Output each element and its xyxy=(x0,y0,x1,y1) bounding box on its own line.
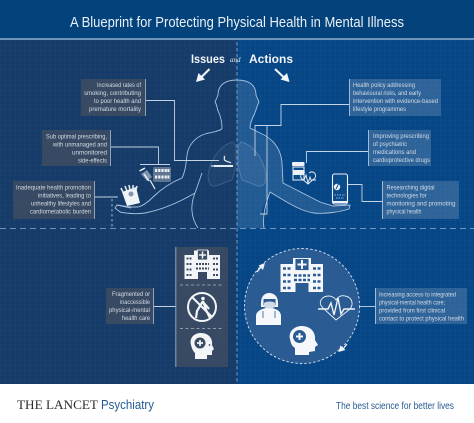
callout: prescribing issue xyxy=(42,130,111,166)
callout: smoking xyxy=(81,79,146,116)
callout: digital technologies: Researching digital xyxy=(386,186,434,192)
callout: health promotion: initiatives, leading to xyxy=(38,194,92,200)
heading: issues and actions: Issues xyxy=(191,52,225,66)
callout: fragmented care: health care xyxy=(122,316,151,322)
title: A Blueprint for Protecting Physical Health in Mental Illness xyxy=(70,14,404,31)
callout: health promotion: Inadequate health promotion xyxy=(16,186,91,192)
callout: integrated access: Increasing access to integrated xyxy=(379,292,456,298)
callout: health promotion: cardiometabolic burden xyxy=(30,210,91,216)
panel: issues background xyxy=(0,40,237,384)
icon: hospital xyxy=(280,258,323,292)
logo: The Lancet Psychiatry: Psychiatry xyxy=(101,397,154,412)
callout: digital technologies: monitoring and promoting xyxy=(386,202,456,208)
arrow: issues xyxy=(196,69,210,82)
callout: health policy: lifestyle programmes xyxy=(353,107,406,113)
panel: fragmented care icons xyxy=(176,247,228,367)
callout: digital technologies: technologies for xyxy=(386,194,426,200)
icon: doctor xyxy=(256,293,281,325)
callout: improving prescribing: Improving prescribing xyxy=(373,134,429,140)
arrow: actions xyxy=(275,69,290,82)
callout: health policy xyxy=(349,79,441,116)
icon: heart with pulse xyxy=(318,296,355,320)
callout: integrated access: provided from first clinical xyxy=(379,308,445,314)
body outline left xyxy=(115,80,237,228)
panel: integrated care circle xyxy=(244,248,360,364)
arrow: cycle top xyxy=(257,263,265,272)
heading: issues and actions: and xyxy=(230,56,241,64)
callout: smoking: premature mortality xyxy=(89,107,141,113)
callout: health policy: intervention with evidence-based xyxy=(353,99,438,105)
callout: integrated access: physical-mental health care; xyxy=(379,300,445,306)
logo: The Lancet Psychiatry xyxy=(17,397,154,412)
logo: The Lancet Psychiatry: THE LANCET xyxy=(17,397,98,412)
callout: prescribing issue: side-effects xyxy=(78,158,107,164)
callout: integrated access xyxy=(375,288,467,324)
icon: pill blister pack xyxy=(153,167,171,182)
header band xyxy=(0,0,474,40)
callout: fragmented care: Fragmented or xyxy=(112,292,150,298)
icon: heart with pulse xyxy=(298,172,316,184)
callout: smoking: Increased rates of xyxy=(97,83,141,89)
callout: fragmented care: physical-mental xyxy=(109,308,150,314)
icon: head with medical cross xyxy=(191,333,214,359)
callout: health policy: behavioural risks, and early xyxy=(353,91,421,97)
callout: health promotion xyxy=(13,181,95,219)
panel: actions background xyxy=(237,40,474,384)
icon: syringe xyxy=(140,168,155,189)
callout: health promotion: unhealthy lifestyles and xyxy=(31,202,91,208)
callout: smoking: to poor health and xyxy=(94,99,141,105)
callout: prescribing issue: with unmanaged and xyxy=(52,142,107,148)
icon: head with medical cross xyxy=(290,326,318,355)
arrow: cycle bottom xyxy=(338,344,347,352)
body outline right xyxy=(237,80,350,228)
tagline: The best science for better lives xyxy=(336,401,454,412)
icon: fast food carton xyxy=(121,185,140,206)
right body fill xyxy=(237,80,350,228)
heading: issues and actions: Actions xyxy=(249,52,293,66)
icon: no walking xyxy=(188,293,216,321)
callout: improving prescribing: cardioprotective drugs xyxy=(373,158,430,164)
callout: smoking: smoking, contributing xyxy=(84,91,141,97)
centre dashed divider xyxy=(236,42,238,384)
icon: medication bottle xyxy=(292,162,304,180)
callout: fragmented care xyxy=(106,288,154,324)
callout: improving prescribing: medications and xyxy=(373,150,416,156)
callout: prescribing issue: Sub optimal prescribing, xyxy=(46,134,107,140)
callout: improving prescribing: of psychiatric xyxy=(373,142,407,148)
figure: human body xyxy=(115,80,350,228)
callout: health policy: Health policy addressing xyxy=(353,83,415,89)
callout: digital technologies: physical health xyxy=(386,210,422,216)
icon: cigarette xyxy=(211,156,233,167)
callout: fragmented care: inaccessible xyxy=(120,300,151,306)
callout: digital technologies xyxy=(382,181,459,219)
callout: integrated access: contact to protect physical health xyxy=(379,316,464,322)
heading: issues and actions xyxy=(191,52,293,66)
icon: hospital xyxy=(184,250,220,279)
lungs xyxy=(208,142,236,186)
callout: improving prescribing xyxy=(368,130,431,166)
icon: smartphone xyxy=(332,174,348,204)
callout: prescribing issue: unmonitored xyxy=(72,150,107,156)
